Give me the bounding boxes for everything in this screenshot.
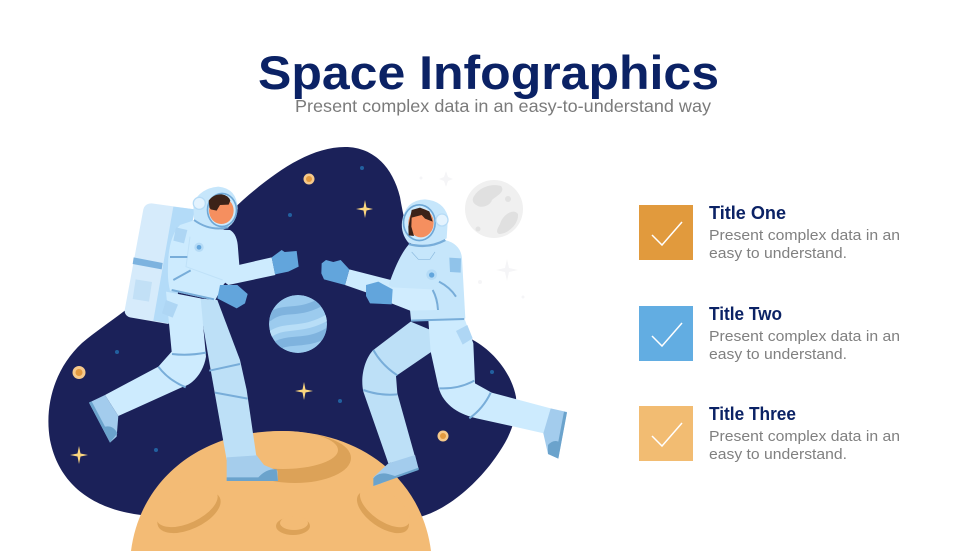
gloves bbox=[321, 260, 349, 285]
suit stripes bbox=[363, 282, 491, 418]
suit pockets bbox=[449, 258, 461, 273]
near leg bbox=[105, 292, 206, 416]
astronaut right bbox=[321, 199, 567, 486]
blue dots bbox=[115, 166, 494, 452]
heading one: Title One bbox=[709, 203, 786, 223]
far arm bbox=[222, 248, 275, 285]
boots bbox=[373, 455, 419, 486]
far arm bbox=[345, 269, 393, 302]
body two: easy to understand. bbox=[709, 346, 847, 363]
dark space blob bbox=[48, 147, 516, 540]
body one: Present complex data in an bbox=[709, 227, 900, 244]
grey moon bbox=[465, 180, 523, 238]
check box light orange bbox=[639, 406, 693, 461]
helmet bbox=[193, 187, 238, 229]
astronaut left bbox=[89, 187, 299, 481]
faint background stars bbox=[420, 171, 524, 298]
orange moon surface bbox=[131, 431, 431, 551]
check box orange bbox=[639, 205, 693, 260]
suit stripes bbox=[158, 257, 248, 399]
near arm panel line bbox=[186, 237, 223, 280]
body two: Present complex data in an bbox=[709, 328, 900, 345]
near arm bbox=[392, 287, 438, 311]
subtitle: Present complex data in an easy-to-understand way bbox=[295, 96, 711, 116]
body one: easy to understand. bbox=[709, 245, 847, 262]
striped planet bbox=[268, 295, 330, 353]
check box blue bbox=[639, 306, 693, 361]
far leg bbox=[362, 322, 432, 463]
torso bbox=[389, 240, 465, 320]
helmet bbox=[402, 199, 448, 246]
torso bbox=[168, 220, 239, 301]
suit pockets bbox=[173, 227, 187, 243]
boots bbox=[89, 395, 118, 443]
heading two: Title Two bbox=[709, 304, 782, 324]
near leg bbox=[428, 320, 551, 433]
body three: Present complex data in an bbox=[709, 428, 900, 445]
list item: Title Two bbox=[639, 304, 900, 363]
gloves bbox=[272, 250, 299, 274]
list item: Title One bbox=[639, 203, 900, 262]
far leg bbox=[198, 298, 257, 460]
heading three: Title Three bbox=[709, 404, 796, 424]
list item: Title Three bbox=[639, 404, 900, 463]
body three: easy to understand. bbox=[709, 446, 847, 463]
illustration: astronauts in space bbox=[48, 147, 567, 551]
orange dots bbox=[72, 174, 448, 442]
backpack bbox=[125, 203, 195, 324]
title: Space Infographics bbox=[258, 46, 719, 99]
gold stars bbox=[70, 200, 373, 464]
